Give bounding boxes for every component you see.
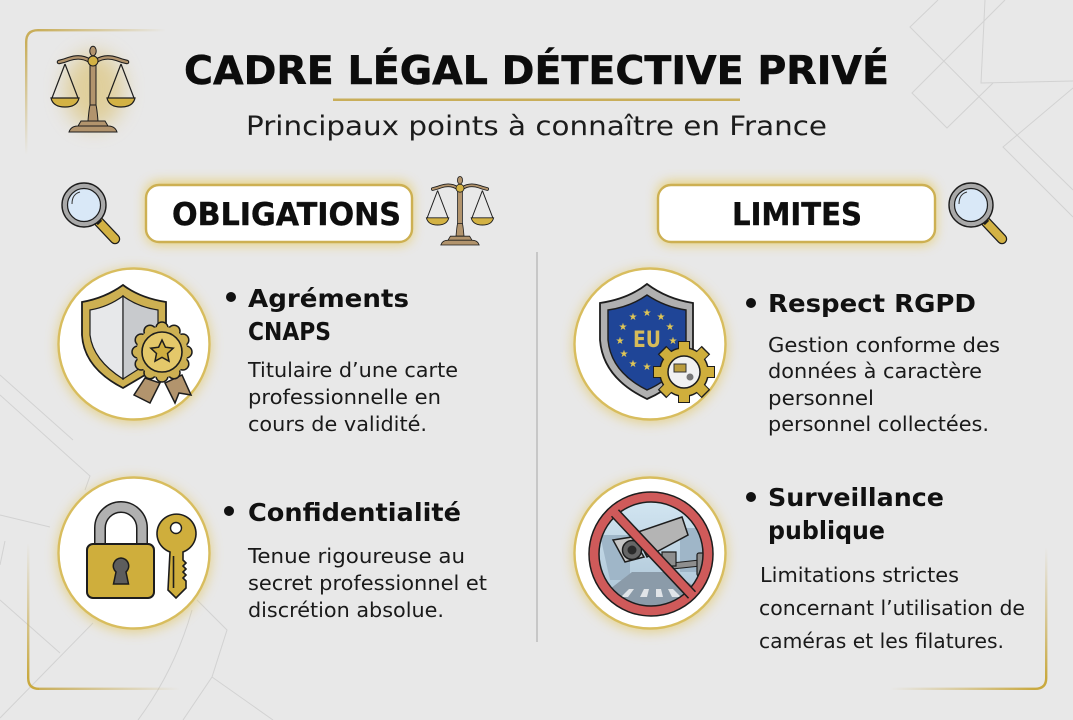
text block xyxy=(768,333,1000,436)
icon: EU shield with gear: ★ xyxy=(616,336,625,347)
text block: Titulaire d’une carte xyxy=(247,358,458,382)
text block: concernant l’utilisation de xyxy=(759,596,1025,620)
icon: header scales of justice xyxy=(51,46,135,132)
text block: secret professionnel et xyxy=(248,571,487,595)
icon: EU shield with gear: ★ xyxy=(643,308,652,319)
text block: Tenue rigoureuse au xyxy=(247,544,465,568)
heading: Agréments xyxy=(248,284,409,313)
title underline xyxy=(333,98,740,101)
text block: données à caractère xyxy=(768,359,982,383)
icon: EU shield with gear: ★ xyxy=(669,336,678,347)
text block: Gestion conforme des xyxy=(768,333,1000,357)
text block xyxy=(759,563,1025,653)
banner: obligations xyxy=(146,182,412,244)
icon: EU shield with gear: ★ xyxy=(666,322,675,333)
panel: surveillance publique xyxy=(573,478,1025,653)
icon: left magnifier xyxy=(62,183,115,239)
heading: Surveillance xyxy=(768,483,944,512)
text block xyxy=(247,358,458,436)
text block: personnel xyxy=(768,386,874,410)
text block: professionnelle en xyxy=(248,385,441,409)
icon: right magnifier xyxy=(949,183,1002,239)
text block xyxy=(247,544,487,622)
heading xyxy=(768,483,944,545)
heading: Respect RGPD xyxy=(768,289,976,318)
heading xyxy=(248,284,409,346)
icon: EU shield with gear: ★ xyxy=(620,349,629,360)
title: CADRE LÉGAL DÉTECTIVE PRIVÉ xyxy=(184,47,889,94)
text block: Limitations strictes xyxy=(760,563,959,587)
icon: EU shield with gear xyxy=(573,268,727,423)
heading: Confidentialité xyxy=(248,498,461,527)
subtitle: Principaux points à connaître en France xyxy=(246,111,827,142)
text block: cours de validité. xyxy=(248,412,427,436)
banner: limites xyxy=(658,182,935,244)
icon: EU shield with gear: ★ xyxy=(629,312,638,323)
heading: CNAPS xyxy=(248,317,331,346)
text block: caméras et les filatures. xyxy=(759,629,1004,653)
bullet xyxy=(226,292,236,302)
icon: EU shield with gear: ★ xyxy=(657,312,666,323)
banner: obligations: OBLIGATIONS xyxy=(172,197,401,233)
icon: shield with rosette xyxy=(57,268,211,423)
icon: crossed-out camera xyxy=(573,478,727,632)
panel: respect RGPD xyxy=(573,268,1000,436)
banner: limites: LIMITES xyxy=(732,197,862,233)
bullet xyxy=(746,298,756,308)
text block: personnel collectées. xyxy=(768,412,989,436)
bullet xyxy=(224,506,234,516)
icon: padlock and key xyxy=(57,478,211,632)
icon: EU shield with gear: ★ xyxy=(619,322,628,333)
icon: EU shield with gear: ★ xyxy=(629,359,638,370)
icon: EU shield with gear: ★ xyxy=(643,362,652,373)
panel: confidentialité xyxy=(57,478,487,632)
central divider xyxy=(536,252,538,642)
icon: small scales xyxy=(426,176,494,245)
text block: discrétion absolue. xyxy=(248,598,444,622)
bullet xyxy=(746,492,756,502)
panel: agréments CNAPS xyxy=(57,268,458,436)
heading: publique xyxy=(768,516,885,545)
icon: EU shield with gear: EU xyxy=(633,328,661,353)
